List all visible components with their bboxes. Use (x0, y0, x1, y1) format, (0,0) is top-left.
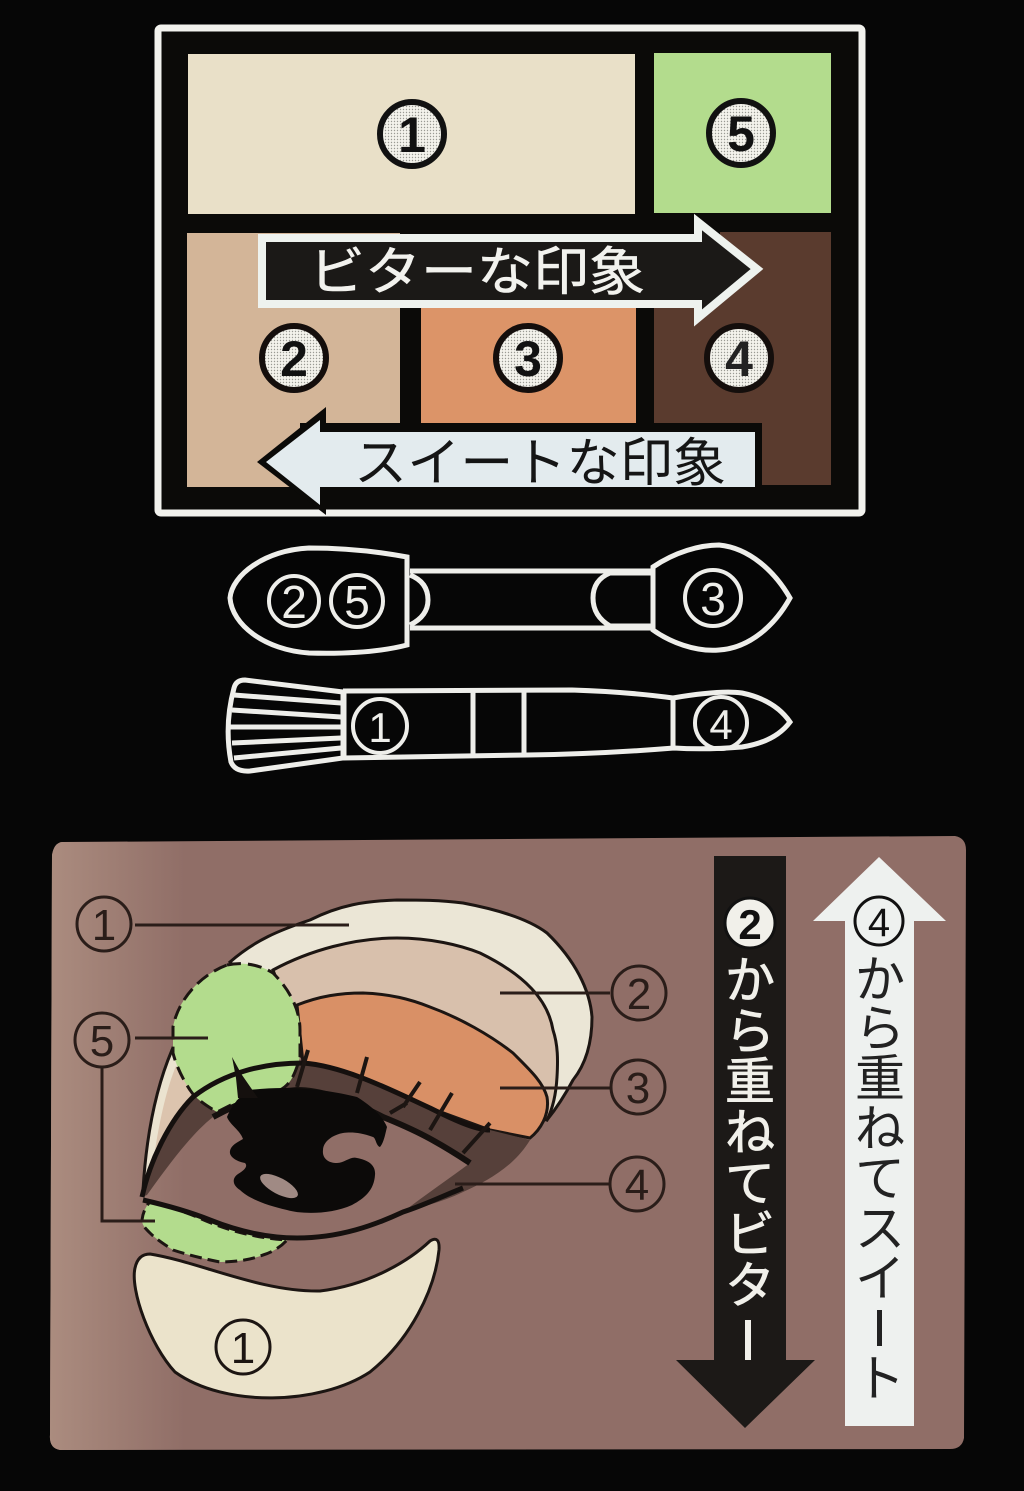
pan 5 green: 5 (727, 106, 755, 162)
callout labels: 1 (92, 901, 116, 950)
arrow: from 2 layered bitter: タ (725, 1258, 775, 1314)
arrow: from 4 layered sweet: 4 (868, 901, 890, 945)
pan 4 brown (654, 232, 831, 485)
arrow: from 4 layered sweet: ね (855, 1101, 905, 1157)
shadow 1 under eye (134, 1239, 439, 1398)
arrow: bitter impression: ビターな印象 (309, 244, 645, 302)
pan 4 brown: 4 (725, 331, 753, 387)
arrow: from 2 layered bitter: 重 (725, 1054, 775, 1110)
iris (227, 1088, 387, 1213)
shadow 2 (273, 938, 558, 1120)
arrow: from 4 layered sweet (813, 857, 946, 1426)
pan 1 cream: 1 (398, 107, 426, 163)
pan 3 orange: 3 (514, 331, 542, 387)
pan 1 cream (188, 54, 635, 214)
arrow: from 2 layered bitter: ね (725, 1105, 775, 1161)
arrow: from 4 layered sweet: て (855, 1151, 905, 1207)
icon: sponge applicator: 2 (281, 576, 307, 628)
arrow: from 4 layered sweet: か (855, 952, 905, 1008)
arrow: from 2 layered bitter: 2 (738, 901, 762, 948)
pan 5 green (654, 53, 831, 213)
icon: sponge applicator: 5 (344, 576, 370, 628)
arrow: from 4 layered sweet: イ (855, 1251, 905, 1307)
callout labels: 5 (90, 1017, 114, 1066)
lower lash line (143, 1188, 463, 1238)
shadow 5 green upper (173, 964, 300, 1112)
lid band brown (142, 1063, 530, 1212)
shadow 3 orange (297, 993, 548, 1138)
callout labels: 2 (627, 970, 651, 1019)
left sliver (143, 1050, 195, 1190)
arrow: from 2 layered bitter (676, 856, 815, 1428)
arrow: sweet impression (257, 407, 762, 515)
upper lash line (142, 1063, 490, 1197)
icon: brush: 1 (368, 704, 392, 751)
arrow: from 2 layered bitter: ら (725, 1004, 775, 1060)
lashes (232, 1050, 490, 1153)
pan 2 beige (187, 233, 400, 487)
arrow: from 2 layered bitter: て (725, 1156, 775, 1212)
arrow: from 4 layered sweet: ら (855, 1001, 905, 1057)
arrow: bitter impression (262, 222, 757, 318)
arrow: from 4 layered sweet: ト (855, 1351, 905, 1407)
pan 3 orange (421, 300, 636, 423)
icon: brush (228, 680, 790, 771)
arrow: from 2 layered bitter: か (725, 953, 775, 1009)
shadow 1 upper lid (230, 900, 592, 1120)
callout labels: 3 (626, 1064, 650, 1113)
icon: sponge applicator (230, 545, 790, 653)
icon: brush: 4 (709, 701, 733, 748)
arrow: from 4 layered sweet: ス (855, 1201, 905, 1257)
shadow 5 green lower (142, 1202, 287, 1262)
callout labels (75, 897, 666, 1221)
shadow 1 under eye: 1 (231, 1324, 255, 1373)
panel: palette (158, 28, 862, 515)
icon: sponge applicator: 3 (700, 573, 726, 625)
arrow: from 2 layered bitter: ビ (725, 1207, 775, 1263)
arrow: sweet impression: スイートな印象 (354, 435, 726, 493)
pan 2 beige: 2 (280, 331, 308, 387)
panel: eye diagram (50, 836, 966, 1450)
callout labels: 4 (625, 1161, 649, 1210)
arrow: from 4 layered sweet: 重 (855, 1051, 905, 1107)
